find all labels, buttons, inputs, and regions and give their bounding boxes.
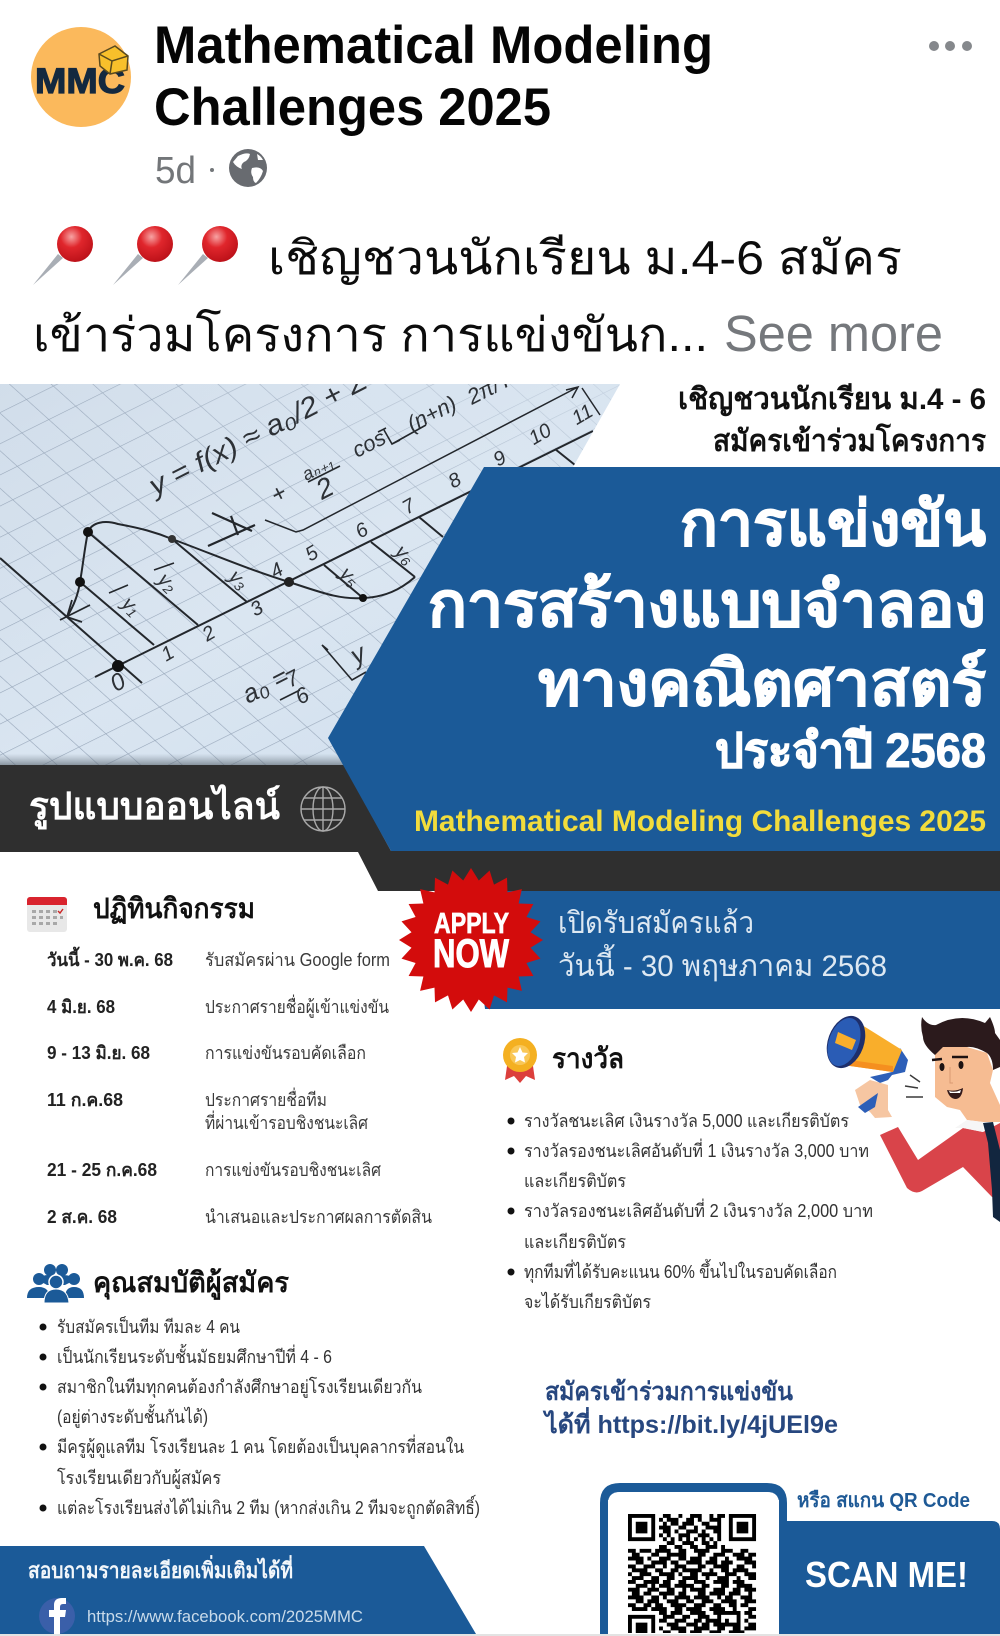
- post caption: [33, 226, 943, 362]
- photo: handwritten maths on grid paper: y: [343, 637, 372, 671]
- schedule dates: [47, 946, 173, 1227]
- photo: handwritten maths on grid paper: 10: [525, 419, 555, 450]
- icon: people group: [27, 1264, 84, 1303]
- qualification list: สมาชิกในทีมทุกคนต้องกำลังศึกษาอยู่โรงเรียนเดียวกัน: [57, 1376, 422, 1398]
- main title: การสร้างแบบจำลอง: [428, 571, 986, 640]
- application link: ได้ที่ https://bit.ly/4jUEl9e: [542, 1407, 838, 1439]
- sound lines: [905, 1075, 923, 1097]
- qr caption: หรือ สแกน QR Code: [797, 1489, 970, 1512]
- schedule descriptions: ประกาศรายชื่อทีม: [205, 1087, 327, 1110]
- prize list: ทุกทีมที่ได้รับคะแนน 60% ขึ้นไปในรอบคัดเลือก: [524, 1259, 837, 1283]
- schedule descriptions: [205, 950, 432, 1227]
- schedule descriptions: รับสมัครผ่าน Google form: [205, 950, 390, 970]
- schedule dates: 9 - 13 มิ.ย. 68: [47, 1043, 150, 1063]
- schedule descriptions: ที่ผ่านเข้ารอบชิงชนะเลิศ: [205, 1110, 368, 1133]
- photo: handwritten maths on grid paper: y₃: [223, 564, 253, 594]
- qualification bullets: [40, 1324, 46, 1512]
- prize list: รางวัลชนะเลิศ เงินรางวัล 5,000 และเกียรติบัตร: [524, 1111, 849, 1131]
- schedule descriptions: การแข่งขันรอบชิงชนะเลิศ: [205, 1160, 381, 1180]
- page name: [154, 16, 713, 137]
- photo: handwritten maths on grid paper: y₅: [334, 561, 364, 591]
- application dates: [558, 907, 887, 983]
- photo: handwritten maths on grid paper: a₀ =: [237, 661, 293, 709]
- prize list: รางวัลรองชนะเลิศอันดับที่ 1 เงินรางวัล 3,000 บาท: [524, 1138, 869, 1161]
- caption line 1: เชิญชวนนักเรียน ม.4-6 สมัคร: [268, 231, 902, 285]
- invitation heading: สมัครเข้าร่วมโครงการ: [713, 422, 986, 458]
- prize bullets: [508, 1118, 514, 1276]
- prize list: จะได้รับเกียรติบัตร: [524, 1291, 651, 1312]
- photo: handwritten maths on grid paper: 2: [310, 470, 339, 506]
- invitation heading: เชิญชวนนักเรียน ม.4 - 6: [678, 383, 986, 417]
- photo: handwritten maths on grid paper: y₂: [152, 567, 182, 597]
- photo: handwritten maths on grid paper: 6: [352, 518, 373, 543]
- photo: handwritten maths on grid paper: 8: [445, 469, 465, 493]
- separator dot: [210, 168, 214, 172]
- qualification list: เป็นนักเรียนระดับชั้นมัธยมศึกษาปีที่ 4 - 6: [57, 1344, 332, 1367]
- schedule dates: วันนี้ - 30 พ.ค. 68: [47, 946, 173, 970]
- caption line 2: เข้าร่วมโครงการ การแข่งขันก...: [33, 308, 708, 361]
- photo: handwritten maths on grid paper: y₁: [116, 591, 144, 620]
- icon: globe: [229, 149, 267, 187]
- photo: handwritten maths on grid paper: [0, 364, 620, 765]
- icon: facebook: [39, 1598, 75, 1634]
- photo: handwritten maths on grid paper: 2: [198, 622, 219, 647]
- tie: [983, 1122, 1000, 1222]
- prize list: รางวัลรองชนะเลิศอันดับที่ 2 เงินรางวัล 2,000 บาท: [524, 1198, 873, 1221]
- photo: handwritten maths on grid paper: 0: [105, 667, 131, 698]
- qualification list: รับสมัครเป็นทีม ทีมละ 4 คน: [57, 1315, 240, 1337]
- photo: handwritten maths on grid paper: 6: [291, 681, 314, 709]
- english subtitle: Mathematical Modeling Challenges 2025: [414, 805, 986, 838]
- application link: สมัครเข้าร่วมการแข่งขัน: [545, 1378, 793, 1406]
- photo: handwritten maths on grid paper: 1: [158, 642, 178, 666]
- schedule dates: 11 ก.ค.68: [47, 1090, 123, 1110]
- main title: [428, 490, 986, 778]
- megaphone: [820, 1010, 908, 1083]
- icon: medal: [503, 1038, 537, 1083]
- photo: handwritten maths on grid paper: 7: [281, 664, 304, 692]
- photo: handwritten maths on grid paper: aₙ₊₁: [299, 452, 337, 485]
- online label: รูปแบบออนไลน์: [29, 784, 280, 830]
- collar: [955, 1120, 983, 1132]
- scan me box: [780, 1521, 1000, 1634]
- application banner: [470, 891, 1000, 1009]
- prizes heading: รางวัล: [552, 1043, 624, 1074]
- photo: handwritten maths on grid paper: 9: [490, 447, 510, 471]
- icon: calendar: [27, 897, 67, 932]
- megaphone handle: [858, 1093, 878, 1113]
- dark band: online format: [0, 765, 1000, 891]
- main title: ประจำปี 2568: [715, 725, 986, 778]
- icon: more options: [929, 41, 972, 51]
- application dates: เปิดรับสมัครแล้ว: [558, 907, 754, 940]
- photo: handwritten maths on grid paper: 4: [267, 559, 287, 583]
- page name: Challenges 2025: [154, 78, 551, 137]
- qualification list: โรงเรียนเดียวกับผู้สมัคร: [57, 1467, 221, 1489]
- photo: handwritten maths on grid paper: 11: [568, 400, 597, 430]
- illustration: man with megaphone: [820, 1010, 1000, 1222]
- qr code: [628, 1514, 756, 1636]
- icon: MMC logo: [31, 27, 131, 127]
- photo: handwritten maths on grid paper: cos: [348, 425, 390, 462]
- hair: [921, 1017, 1000, 1070]
- facebook url: https://www.facebook.com/2025MMC: [87, 1607, 363, 1626]
- qualification list: [57, 1315, 480, 1519]
- scan me label: SCAN ME!: [805, 1554, 968, 1595]
- schedule descriptions: การแข่งขันรอบคัดเลือก: [205, 1043, 366, 1063]
- qualification list: (อยู่ต่างระดับชั้นกันได้): [57, 1404, 208, 1428]
- schedule dates: 4 มิ.ย. 68: [47, 997, 115, 1017]
- icon: three pushpins: [33, 226, 238, 285]
- bottom edge line: [0, 1634, 1000, 1636]
- eyes and mouth: [932, 1057, 968, 1099]
- apply now badge: APPLY: [434, 908, 509, 940]
- photo: handwritten maths on grid paper: 5: [302, 541, 323, 566]
- schedule dates: 2 ส.ค. 68: [47, 1207, 117, 1227]
- schedule descriptions: นำเสนอและประกาศผลการตัดสิน: [205, 1207, 432, 1227]
- qualification list: มีครูผู้ดูแลทีม โรงเรียนละ 1 คน โดยต้องเป็นบุคลากรที่สอนใน: [57, 1434, 464, 1458]
- contact footer: [0, 1546, 476, 1634]
- calendar heading: ปฏิทินกิจกรรม: [93, 893, 255, 925]
- invitation heading: [678, 383, 986, 458]
- scan panel: [600, 1483, 1000, 1636]
- page name: Mathematical Modeling: [154, 16, 713, 75]
- photo: handwritten maths on grid paper: 7: [399, 494, 420, 519]
- arm and shirt: [880, 1123, 1000, 1197]
- prize list: และเกียรติบัตร: [524, 1171, 626, 1191]
- apply now badge: [399, 868, 543, 1012]
- post header: [31, 16, 972, 192]
- application link: [542, 1378, 838, 1439]
- main title: ทางคณิตศาสตร์: [538, 649, 986, 719]
- photo: handwritten maths on grid paper: y₆: [389, 539, 419, 569]
- qr frame: [600, 1483, 787, 1634]
- qualifications heading: คุณสมบัติผู้สมัคร: [93, 1267, 289, 1300]
- photo: handwritten maths on grid paper: +: [266, 479, 291, 509]
- apply now badge: NOW: [433, 932, 509, 976]
- photo: handwritten maths on grid paper: y = f(x) ≈ a₀/2 + Σ: [142, 364, 373, 502]
- schedule descriptions: ประกาศรายชื่อผู้เข้าแข่งขัน: [205, 994, 389, 1018]
- photo: handwritten maths on grid paper: (n+n): [403, 391, 461, 436]
- prize list: และเกียรติบัตร: [524, 1232, 626, 1252]
- icon: MMC logo: MMC: [35, 62, 125, 101]
- panel: prizes: [503, 1038, 873, 1312]
- application dates: วันนี้ - 30 พฤษภาคม 2568: [558, 944, 887, 983]
- prize list: [524, 1111, 873, 1312]
- blue title panel: [328, 467, 1000, 851]
- photo: handwritten maths on grid paper: 3: [247, 597, 267, 621]
- panel: applicant qualifications: [27, 1264, 480, 1519]
- qualification list: แต่ละโรงเรียนส่งได้ไม่เกิน 2 ทีม (หากส่งเกิน 2 ทีมจะถูกตัดสิทธิ์): [57, 1494, 480, 1519]
- photo: handwritten maths on grid paper: 2π/T: [462, 365, 517, 410]
- schedule dates: 21 - 25 ก.ค.68: [47, 1160, 157, 1180]
- contact heading: สอบถามรายละเอียดเพิ่มเติมได้ที่: [28, 1554, 293, 1583]
- post time: 5d: [155, 150, 196, 192]
- see more link: See more: [724, 305, 943, 362]
- icon: wireframe globe: [301, 787, 345, 831]
- panel: activity calendar: [27, 893, 432, 1227]
- hand: [855, 1080, 892, 1118]
- face and neck: [935, 1047, 1000, 1122]
- main title: การแข่งขัน: [680, 490, 986, 559]
